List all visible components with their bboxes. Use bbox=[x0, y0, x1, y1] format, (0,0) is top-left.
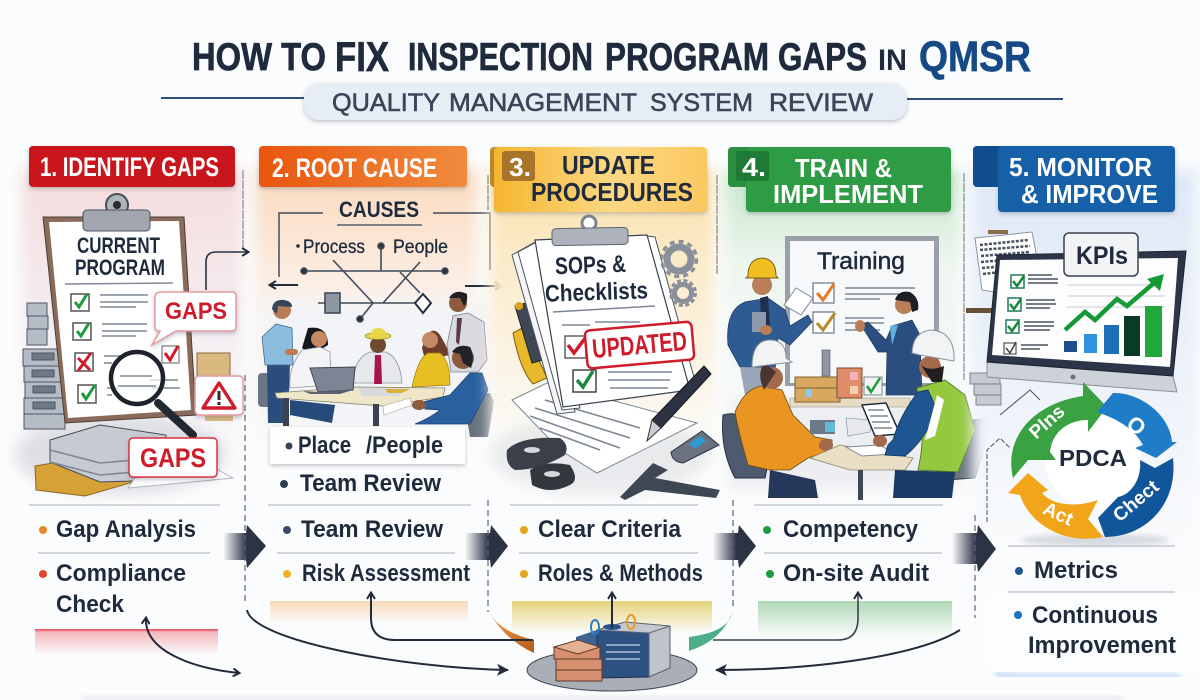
arrow: compliance check curve bbox=[146, 618, 239, 673]
whiteboard: training: Training bbox=[817, 248, 905, 275]
text box: metrics and improvement: Metrics bbox=[1034, 557, 1118, 584]
title: QMSR bbox=[919, 33, 1031, 81]
clipboard: current program: PROGRAM bbox=[75, 255, 165, 280]
text: clear criteria: Clear Criteria bbox=[538, 516, 682, 543]
icon: square ruler bbox=[620, 463, 720, 500]
header: update procedures: 3. bbox=[509, 152, 531, 182]
text box: place people bbox=[270, 427, 465, 464]
header: monitor and improve: & IMPROVE bbox=[1021, 179, 1158, 209]
text box: metrics and improvement: Continuous bbox=[1032, 602, 1158, 629]
segment: plan: Plns bbox=[1025, 401, 1069, 444]
clipboard: sops and checklists: SOPs & bbox=[555, 251, 626, 280]
person: man with hat bbox=[353, 328, 402, 384]
text: team review upper: Team Review bbox=[300, 470, 441, 497]
tag: kpis: KPIs bbox=[1076, 242, 1128, 270]
title: PROGRAM bbox=[605, 36, 769, 79]
text box: place people: /People bbox=[366, 432, 443, 459]
panel: 4 train and implement bbox=[722, 147, 990, 637]
desk bbox=[810, 403, 913, 500]
header: identify gaps bbox=[29, 146, 235, 187]
icon: yellow highlighter bbox=[513, 302, 547, 384]
segment: do: O bbox=[1122, 411, 1151, 441]
arrow: to hub from left bbox=[247, 610, 508, 670]
sheets stack bbox=[512, 383, 697, 473]
person: seated foreground blue bbox=[412, 346, 494, 437]
kpi checklist bbox=[1004, 275, 1058, 354]
subtitle pill: MANAGEMENT bbox=[449, 89, 637, 117]
wedge: green bbox=[689, 613, 732, 651]
callout: gaps upper bbox=[152, 292, 236, 345]
monitor: kpi dashboard bbox=[987, 251, 1186, 392]
header: monitor and improve bbox=[973, 146, 1175, 212]
person: standing left bbox=[258, 300, 298, 423]
callout: gaps lower: GAPS bbox=[140, 443, 206, 473]
report sheet bbox=[975, 230, 1045, 300]
header: root cause bbox=[259, 146, 467, 187]
title: IN bbox=[878, 44, 907, 77]
title: FIX bbox=[335, 33, 389, 80]
whiteboard: training bbox=[785, 236, 939, 386]
text: gap analysis: Gap Analysis bbox=[56, 516, 196, 543]
title: HOW TO bbox=[192, 36, 326, 79]
stack under monitor bbox=[970, 373, 1001, 405]
text box: metrics and improvement: Improvement bbox=[1028, 632, 1176, 659]
arrow: hub to roles and methods bbox=[611, 593, 613, 628]
easel clamp bbox=[966, 308, 996, 313]
person: seated worker in hi-vis bbox=[873, 330, 990, 498]
header: train and implement: IMPLEMENT bbox=[773, 179, 923, 209]
person: seated worker in orange bbox=[722, 340, 833, 498]
text: compliance check bbox=[39, 560, 186, 618]
header: monitor and improve: 5. MONITOR bbox=[1009, 152, 1152, 182]
text: team review lower: Team Review bbox=[301, 516, 443, 543]
stamp: updated bbox=[585, 321, 694, 369]
chart: pdca cycle bbox=[1008, 382, 1177, 546]
icon: file stacks bbox=[23, 303, 65, 429]
segment: check: Chect bbox=[1109, 476, 1164, 526]
text: roles and methods: Roles & Methods bbox=[538, 560, 703, 587]
accent bar orange bbox=[270, 601, 468, 623]
header: update procedures: PROCEDURES bbox=[531, 177, 693, 207]
callout: gaps lower bbox=[129, 438, 217, 477]
clipboard: sops and checklists: Checklists bbox=[545, 277, 648, 308]
stamp: updated: UPDATED bbox=[591, 326, 688, 364]
person: woman trainer bbox=[855, 292, 922, 395]
heading: causes: CAUSES bbox=[339, 197, 419, 222]
flow arrows between panels bbox=[223, 525, 996, 572]
accent bar green bbox=[758, 601, 952, 637]
text: process people: Process bbox=[303, 237, 365, 258]
subtitle pill bbox=[161, 83, 1063, 120]
callout: gaps upper: GAPS bbox=[165, 298, 227, 325]
icon: warning bbox=[195, 376, 243, 415]
header: update procedures bbox=[490, 147, 707, 212]
text: risk assessment: Risk Assessment bbox=[302, 560, 470, 587]
panel: 3 update procedures bbox=[490, 147, 720, 633]
arrow: to hub from right bbox=[716, 630, 960, 670]
person: man standing right bbox=[447, 292, 487, 372]
chart: pdca cycle: PDCA bbox=[1059, 445, 1127, 471]
clipboard: current program: CURRENT bbox=[77, 233, 160, 258]
divider bbox=[29, 504, 220, 506]
table with boxes bbox=[790, 368, 910, 407]
subtitle pill: REVIEW bbox=[769, 89, 873, 117]
title: INSPECTION bbox=[408, 36, 593, 79]
wedge: orange bbox=[490, 613, 534, 653]
bottom: server and storage hub bbox=[527, 615, 697, 691]
segment: check bbox=[1098, 458, 1174, 537]
subtitle pill: QUALITY bbox=[332, 89, 440, 117]
panel: 5 monitor and improve bbox=[966, 146, 1200, 676]
text: process people: People bbox=[393, 237, 448, 258]
title: GAPS bbox=[778, 36, 867, 79]
person: woman laptop bbox=[290, 328, 335, 423]
checklist bbox=[71, 294, 180, 403]
header: identify gaps: 1. IDENTIFY GAPS bbox=[40, 152, 219, 182]
icon: magnifier bbox=[111, 352, 193, 435]
clipboard: current program bbox=[43, 194, 196, 423]
illustration: team around table bbox=[258, 292, 494, 437]
arrow: hub to on-site audit bbox=[713, 593, 858, 640]
icon: books bbox=[35, 425, 233, 496]
text: compliance check: Check bbox=[56, 591, 125, 618]
header: update procedures: UPDATE bbox=[562, 150, 655, 180]
text: competency: Competency bbox=[783, 516, 919, 543]
panel: 1 identify gaps bbox=[15, 146, 243, 655]
trend arrow bbox=[1065, 274, 1164, 330]
accent bar red bbox=[35, 629, 218, 655]
arrow: hub to risk assessment bbox=[371, 593, 533, 640]
cylinder prop bbox=[822, 350, 830, 376]
icon: eraser bbox=[671, 431, 719, 463]
arrow: left from causes bbox=[270, 284, 298, 286]
laptop bbox=[310, 367, 355, 392]
tag: kpis bbox=[1064, 233, 1138, 276]
panel: 2 root cause bbox=[255, 146, 501, 623]
segment: plan bbox=[1011, 382, 1107, 478]
table bbox=[275, 387, 445, 406]
header: root cause: 2. ROOT CAUSE bbox=[272, 153, 437, 183]
segment: act bbox=[1008, 473, 1103, 539]
subtitle pill: SYSTEM bbox=[650, 89, 753, 117]
connector lines bbox=[206, 170, 1040, 618]
icon: clamps bbox=[507, 438, 575, 490]
person: woman yellow bbox=[412, 331, 450, 387]
icon: package bbox=[197, 353, 233, 421]
icon: pen bbox=[647, 366, 711, 441]
icon: gears bbox=[662, 242, 696, 306]
heading: causes bbox=[279, 197, 490, 277]
segment: do bbox=[1097, 393, 1177, 458]
boxes bbox=[554, 640, 602, 681]
accent bar yellow bbox=[512, 601, 712, 633]
text: on-site audit: On-site Audit bbox=[783, 560, 929, 587]
fishbone diagram bbox=[301, 243, 448, 322]
header: train and implement bbox=[728, 147, 951, 212]
arrow: right from causes bbox=[465, 285, 501, 287]
segment: act: Act bbox=[1039, 498, 1077, 531]
bar chart bbox=[1064, 306, 1162, 357]
clipboard: sops and checklists bbox=[512, 216, 697, 414]
header: train and implement: 4. bbox=[742, 152, 766, 182]
title bbox=[192, 33, 1031, 81]
text box: metrics and improvement bbox=[985, 557, 1200, 676]
text box: place people: Place bbox=[298, 432, 351, 459]
person: trainer with helmet bbox=[728, 258, 813, 395]
text: process people bbox=[296, 237, 448, 258]
header: train and implement: TRAIN & bbox=[795, 153, 892, 183]
text: compliance check: Compliance bbox=[56, 560, 186, 587]
